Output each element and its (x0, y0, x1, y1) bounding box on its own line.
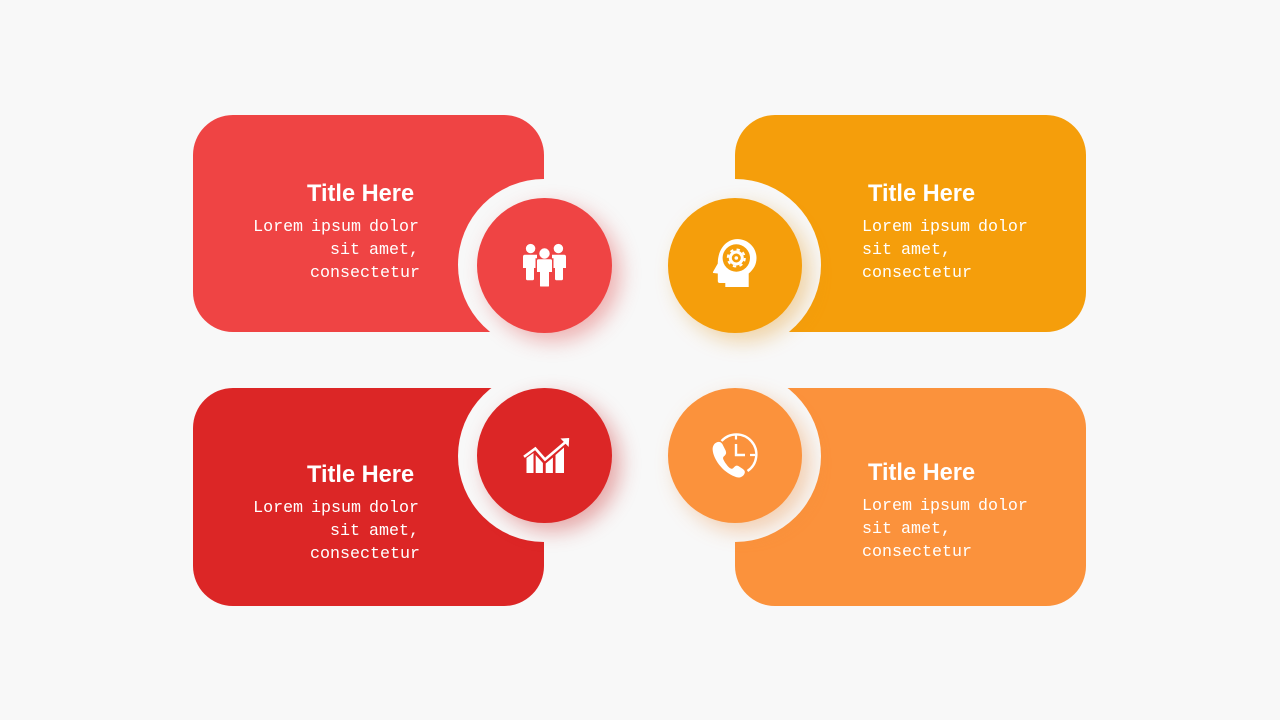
icon disc: phone clock (668, 388, 802, 523)
heading: bottom left: Title Here (307, 462, 414, 488)
panel: top right amber (664, 115, 1086, 353)
card background: amber (735, 115, 1086, 332)
text block: top right: Lorem ipsum dolor sit amet, consectetur (862, 218, 1028, 283)
icon disc: people (477, 198, 612, 333)
heading: bottom right: Title Here (868, 460, 975, 486)
panel: top left red (193, 115, 632, 352)
text block: bottom right: Lorem ipsum dolor sit amet, consectetur (862, 497, 1028, 562)
card background: red (193, 115, 544, 332)
text block: bottom left: Lorem ipsum dolor sit amet, consectetur (253, 499, 420, 564)
panel: bottom right orange (664, 384, 1086, 606)
cut-out ring (649, 370, 821, 542)
icon disc: chart (477, 388, 612, 523)
panel: bottom left dark red (193, 384, 632, 606)
card background: dark red (193, 388, 544, 606)
icon: team of people (523, 244, 566, 286)
heading: top right: Title Here (868, 181, 975, 207)
text block: top left: Lorem ipsum dolor sit amet, consectetur (253, 218, 420, 283)
cut-out ring (458, 370, 630, 542)
icon: phone and clock (712, 433, 758, 478)
heading: top left: Title Here (307, 181, 414, 207)
cut-out ring (649, 179, 821, 351)
card background: orange (735, 388, 1086, 606)
icon: rising bar chart (523, 438, 570, 473)
icon: head with gear (712, 239, 756, 287)
cut-out ring (458, 179, 630, 351)
icon disc: head (668, 198, 802, 333)
